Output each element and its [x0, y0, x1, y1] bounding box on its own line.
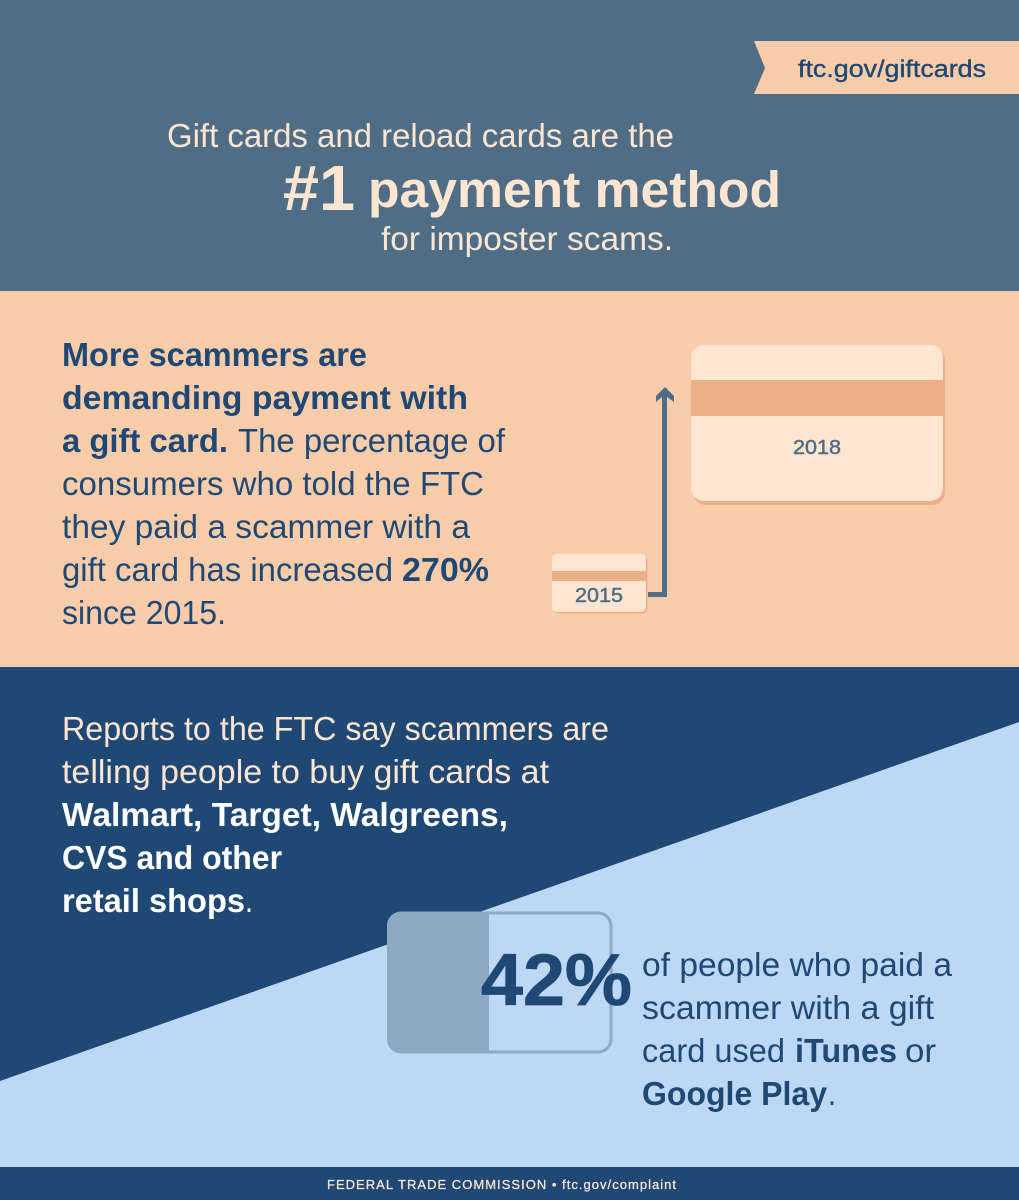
text block: retail shops: . [245, 882, 253, 919]
panel: gift card increase [0, 291, 1019, 667]
ribbon: website link [754, 41, 1019, 94]
heading: payment method: Gift cards and reload cards are the [167, 117, 674, 154]
text block: retail shops: retail shops [62, 882, 245, 919]
text block: 270% increase: gift card has increased [62, 551, 393, 588]
text block: retail shops: CVS and other [62, 839, 282, 876]
text block: 270% increase: since 2015. [62, 594, 226, 631]
text block: 270% increase: The percentage of [238, 422, 506, 459]
text block: iTunes or Google Play: Google Play [642, 1075, 828, 1112]
text block: 270% increase: More scammers are [62, 336, 367, 373]
text block: iTunes or Google Play: of people who paid a [642, 946, 953, 983]
arrow: growth [648, 387, 674, 594]
panel: header [0, 0, 1019, 291]
text block: 270% increase [62, 336, 506, 631]
icon: card 42 percent filled [387, 912, 611, 1054]
text block: iTunes or Google Play: or [905, 1032, 936, 1069]
heading: payment method: #1 [283, 152, 355, 224]
heading: payment method: for imposter scams. [381, 220, 673, 257]
text block: 270% increase: a gift card. [62, 422, 228, 459]
text block: iTunes or Google Play: card used [642, 1032, 785, 1069]
footer: FEDERAL TRADE COMMISSION • ftc.gov/complaint [327, 1177, 676, 1192]
icon: 2018 gift card [691, 345, 945, 505]
text block: 270% increase: consumers who told the FTC [62, 465, 484, 502]
icon: 2015 gift card [552, 554, 648, 614]
icon: 2018 gift card: 2018 [793, 437, 841, 459]
icon: 2015 gift card: 2015 [575, 585, 623, 607]
text block: retail shops: Reports to the FTC say scammers are [62, 710, 609, 747]
panel: retailers and iTunes [0, 667, 1019, 1167]
text block: 270% increase: they paid a scammer with a [62, 508, 471, 545]
text block: retail shops [62, 710, 609, 919]
text block: 270% increase: 270% [402, 551, 489, 588]
ribbon: website link: ftc.gov/giftcards [798, 56, 986, 83]
text block: iTunes or Google Play: . [828, 1075, 836, 1112]
stat: 42%: 42% [481, 940, 632, 1021]
text block: retail shops: telling people to buy gift cards at [62, 753, 549, 790]
text block: iTunes or Google Play: scammer with a gift [642, 989, 934, 1026]
footer [0, 1167, 1019, 1200]
text block: 270% increase: demanding payment with [62, 379, 468, 416]
text block: iTunes or Google Play: iTunes [795, 1032, 897, 1069]
heading: payment method [167, 117, 781, 257]
text block: retail shops: Walmart, Target, Walgreens, [62, 796, 508, 833]
text block: iTunes or Google Play [642, 946, 953, 1112]
heading: payment method: payment method [368, 161, 781, 218]
